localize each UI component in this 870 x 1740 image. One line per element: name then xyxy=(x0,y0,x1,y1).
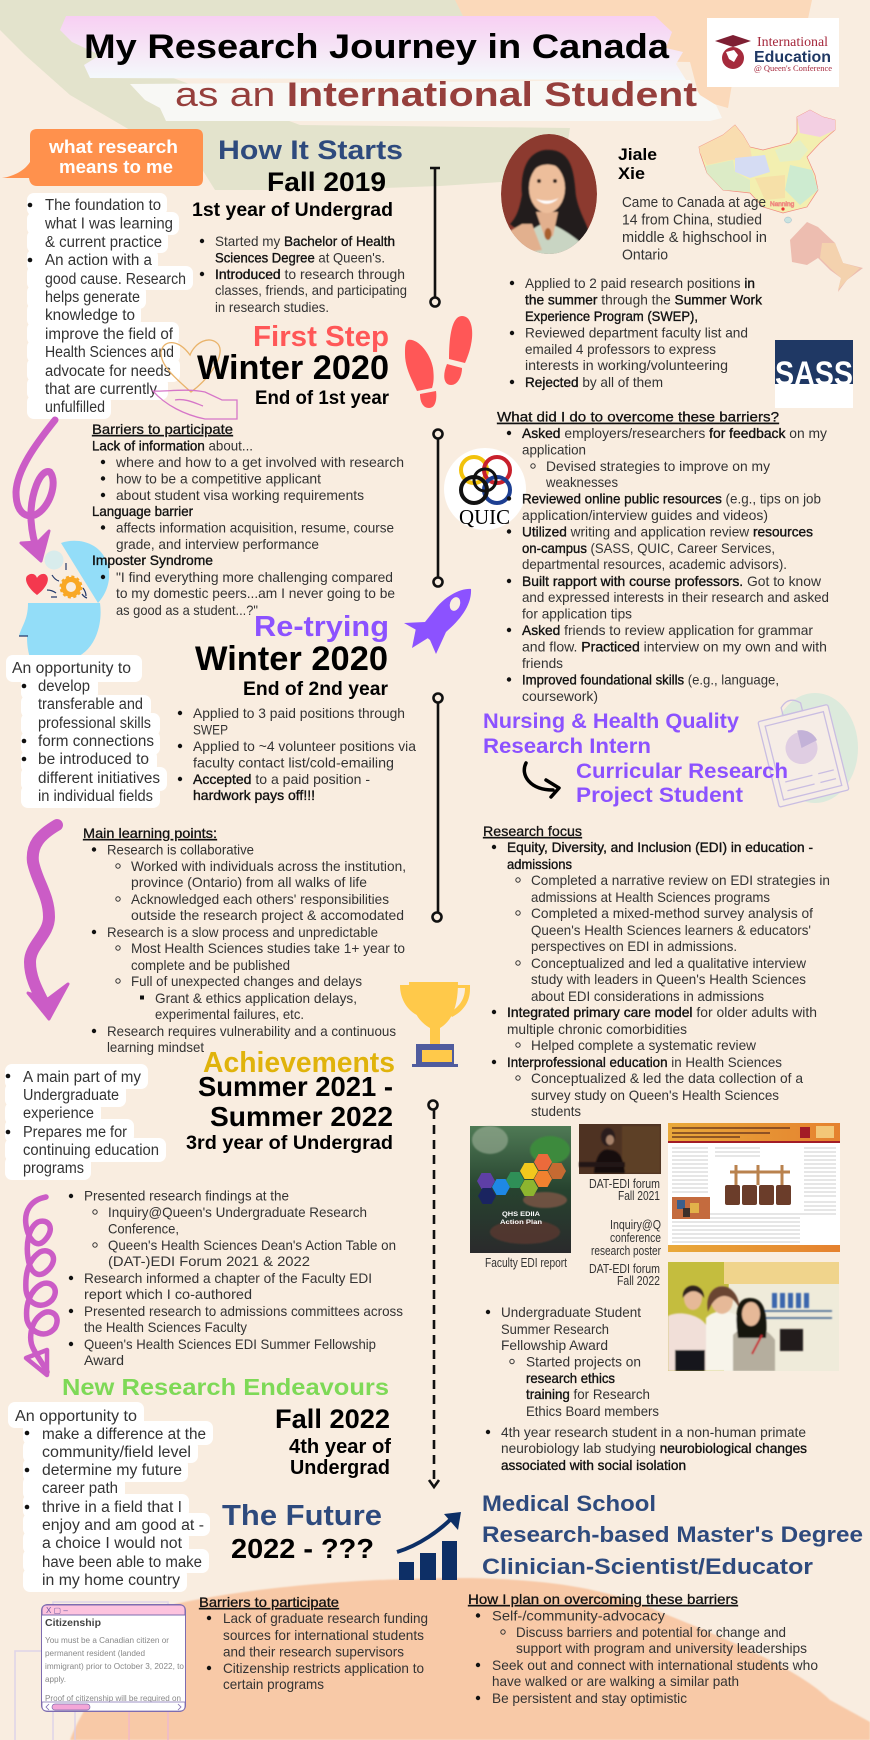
text block: an opportunity to (white highlight): develop xyxy=(38,678,90,695)
captions for images xyxy=(485,1177,661,1288)
text block: research focus: Completed a narrative review on EDI strategies in xyxy=(531,872,830,888)
heading: New Research Endeavours xyxy=(62,1374,391,1479)
text block: new research roles: Ethics Board members xyxy=(526,1403,659,1419)
title brush strokes xyxy=(60,16,722,121)
heading: The Future: The Future xyxy=(222,1500,382,1532)
background wash: orange blob bottom xyxy=(70,1578,870,1740)
text block: how it starts: classes, friends, and participating xyxy=(215,282,407,298)
text block: an opportunity for the future (white highlight): make a difference at the xyxy=(42,1426,206,1443)
captions for images: Fall 2022 xyxy=(617,1274,660,1288)
text block: achievements list: Conference, xyxy=(108,1220,179,1236)
text block: barriers to participate: as good as a student...?" xyxy=(116,602,258,618)
text block: how I overcame barriers: and expressed interests in their research and asked xyxy=(522,589,829,605)
text block: research focus: study with leaders in Queen's Health Sciences xyxy=(531,971,806,987)
logo: International Education at Queen's Conference: Education xyxy=(754,49,831,66)
citizenship window screenshot: Citizenship xyxy=(45,1617,101,1629)
text block: what research means (white highlight): The foundation to xyxy=(45,197,161,214)
icon: heart in hand xyxy=(153,340,237,419)
text block: how it starts: in research studies. xyxy=(215,299,329,315)
text block: achievements list: Presented research findings at the xyxy=(84,1188,289,1204)
text block: research focus: admissions at Health Sciences programs xyxy=(531,889,770,905)
future goals list: Clinician-Scientist/Educator xyxy=(482,1554,813,1579)
QUIC logo xyxy=(444,448,526,530)
logo: SASS: SASS xyxy=(775,355,853,393)
text block: what research means (white highlight): Health Sciences and xyxy=(45,344,174,361)
text block: an opportunity to (white highlight): be introduced to xyxy=(38,751,149,768)
citizenship window screenshot: immigrant) prior to October 3, 2022, to xyxy=(45,1662,185,1671)
text block: what research means (white highlight): improve the field of xyxy=(45,326,174,343)
text block: first step actions: Reviewed department faculty list and xyxy=(525,324,748,340)
map: Ontario xyxy=(790,222,863,292)
text block: an opportunity for the future (white highlight): have been able to make xyxy=(42,1554,202,1571)
text block: achievements list: the Health Sciences Faculty xyxy=(84,1319,247,1335)
text block: future barriers: sources for international students xyxy=(223,1627,424,1643)
heading: How It Starts: How It Starts xyxy=(218,135,403,165)
arrow: magenta squiggle 1 xyxy=(16,420,55,561)
text block: overcoming future barriers: Discuss barriers and potential for change and xyxy=(516,1624,786,1640)
text block: how I overcame barriers xyxy=(507,425,829,704)
timeline segment 1 xyxy=(430,168,440,306)
timeline segment 3 xyxy=(432,694,442,922)
text block: how I overcame barriers: Asked friends to review application for grammar xyxy=(522,622,813,638)
text block: how it starts: Sciences Degree at Queen's. xyxy=(215,250,385,266)
captions for images: research poster xyxy=(591,1244,661,1258)
speech bubble: what research means to me: what research xyxy=(48,137,178,157)
image: Faculty EDI report cover: Action Plan xyxy=(500,1219,542,1226)
text block: future barriers xyxy=(199,1594,428,1692)
heading: internship roles: Project Student xyxy=(576,784,743,807)
text block: future barriers: certain programs xyxy=(223,1676,324,1692)
citizenship window screenshot: X ▢ – xyxy=(46,1606,68,1615)
text block: how I overcame barriers: application/interview guides and videos) xyxy=(522,507,768,523)
text block: barriers to participate: Barriers to participate xyxy=(92,421,233,437)
heading: internship roles: Research Intern xyxy=(483,735,651,758)
text block: research focus: perspectives on EDI in admissions. xyxy=(531,938,737,954)
arrow: curved black xyxy=(524,763,559,797)
text block: barriers to participate: Imposter Syndrome xyxy=(92,552,213,568)
text block: about me xyxy=(622,194,767,264)
neon window frames decoration xyxy=(15,1602,168,1740)
text block: first step actions: interests in working/volunteering xyxy=(525,357,728,373)
text block: research focus: admissions xyxy=(507,856,572,872)
map: China: Nanning xyxy=(770,201,795,208)
text block: first step actions: the summer through the Summer Work xyxy=(525,292,763,308)
text block: what research means (white highlight) xyxy=(27,193,193,419)
heading: internship roles: Nursing & Health Quality xyxy=(483,710,739,733)
text block: barriers to participate xyxy=(92,421,404,618)
text block: an opportunity to (white highlight): different initiatives xyxy=(38,770,160,787)
text block: main part of undergrad (white highlight): experience xyxy=(23,1105,94,1122)
text block: an opportunity for the future (white highlight): a choice I would not xyxy=(42,1535,183,1552)
text block: barriers to participate: Language barrier xyxy=(92,503,193,519)
citizenship window screenshot: You must be a Canadian citizen or xyxy=(45,1636,169,1645)
text block: first step actions: emailed 4 professors to express xyxy=(525,341,716,357)
text block: what research means (white highlight): unfulfilled xyxy=(45,399,105,416)
text block: how it starts: Started my Bachelor of Health xyxy=(215,233,395,249)
speech bubble: what research means to me xyxy=(2,129,203,186)
captions for images: Faculty EDI report xyxy=(485,1256,567,1270)
heading: How It Starts: Fall 2019 xyxy=(267,167,386,197)
text block: overcoming future barriers: have walked or are walking a similar path xyxy=(492,1673,739,1689)
text block: re-trying actions: Applied to ~4 volunteer positions via xyxy=(193,738,416,754)
text block: about me: Ontario xyxy=(622,246,668,264)
text block: first step actions: Rejected by all of them xyxy=(525,374,663,390)
text block: achievements list: Queen's Health Sciences Dean's Action Table on xyxy=(108,1237,396,1253)
icon: rising bar chart xyxy=(397,1512,461,1580)
QUIC logo: QUIC xyxy=(459,505,510,529)
text block: re-trying actions: faculty contact list/cold-emailing xyxy=(193,754,394,770)
text block: about me: Came to Canada at age xyxy=(622,194,766,211)
citizenship window screenshot: apply. xyxy=(45,1675,66,1684)
text block: what research means (white highlight): An action with a xyxy=(45,252,152,269)
text block: barriers to participate: how to be a competitive applicant xyxy=(116,470,321,486)
text block: barriers to participate: "I find everything more challenging compared xyxy=(116,569,393,585)
heading: Re-trying: End of 2nd year xyxy=(243,679,389,700)
text block: how I overcame barriers: application xyxy=(522,442,586,458)
heading: Achievements: Achievements xyxy=(203,1047,395,1079)
text block: how I overcame barriers: Improved foundational skills (e.g., language, xyxy=(522,672,779,688)
captions for images: DAT-EDI forum xyxy=(589,1262,660,1276)
text block: main learning points: complete and be published xyxy=(131,957,290,973)
text block: main learning points: Research is collaborative xyxy=(107,842,254,858)
text block: main learning points xyxy=(83,825,406,1055)
image: DAT-EDI forum 2022 photo of three women xyxy=(668,1262,839,1371)
text block: what research means (white highlight): helps generate xyxy=(45,289,140,306)
text block: main part of undergrad (white highlight): Prepares me for xyxy=(23,1124,127,1141)
text block: overcoming future barriers: Be persistent and stay optimistic xyxy=(492,1690,687,1706)
text block: how I overcame barriers: Reviewed online public resources (e.g., tips on job xyxy=(522,490,821,506)
text block: research focus: students xyxy=(531,1103,581,1119)
heading: New Research Endeavours: Undergrad xyxy=(290,1457,390,1479)
text block: first step actions: Applied to 2 paid research positions in xyxy=(525,275,755,291)
text block: how I overcame barriers: friends xyxy=(522,655,563,671)
heading: The Future xyxy=(222,1500,382,1564)
icon: trophy xyxy=(400,982,470,1067)
text block: how I overcame barriers: departmental resources, academic advisors). xyxy=(522,556,787,572)
text block: research focus: Interprofessional education in Health Sciences xyxy=(507,1054,782,1070)
text block: main learning points: Main learning points: xyxy=(83,825,217,841)
text block: main learning points: Acknowledged each others' responsibilities xyxy=(131,891,389,907)
text block: research focus: multiple chronic comorbidities xyxy=(507,1021,687,1037)
heading: internship roles: Curricular Research xyxy=(576,760,788,783)
text block: achievements list xyxy=(69,1188,403,1368)
map: China xyxy=(699,110,835,223)
title: My Research Journey in Canada xyxy=(84,28,670,66)
text block: new research roles: Undergraduate Student xyxy=(501,1304,641,1320)
text block: how I overcame barriers: coursework) xyxy=(522,688,598,704)
text block: overcoming future barriers: Seek out and connect with international students who xyxy=(492,1657,818,1673)
text block: new research roles: neurobiology lab studying neurobiological changes xyxy=(501,1440,807,1456)
text block: future barriers: Citizenship restricts application to xyxy=(223,1660,424,1676)
text block: research focus: about EDI considerations in admissions xyxy=(531,988,764,1004)
text block: main part of undergrad (white highlight): programs xyxy=(23,1160,84,1177)
text block: re-trying actions: SWEP xyxy=(193,722,228,738)
text block: overcoming future barriers xyxy=(468,1591,818,1706)
text block: what research means (white highlight): knowledge to xyxy=(45,307,135,324)
text block: how it starts xyxy=(200,233,407,315)
timeline segment 4: dashed arrow xyxy=(428,1100,439,1487)
captions for images: DAT-EDI forum xyxy=(589,1177,660,1191)
text block: first step actions: Experience Program (SWEP), xyxy=(525,308,698,324)
text block: main learning points: Research requires vulnerability and a continuous xyxy=(107,1023,396,1039)
text block: what research means (white highlight): what I was learning xyxy=(44,216,173,232)
text block: main part of undergrad (white highlight): Undergraduate xyxy=(23,1087,119,1104)
name: Jiale Xie: Jiale xyxy=(618,145,657,164)
text block: main learning points: Grant & ethics application delays, xyxy=(155,990,357,1006)
text block: main learning points: Full of unexpected changes and delays xyxy=(131,973,362,989)
heading: How It Starts xyxy=(192,135,403,221)
heading: Achievements xyxy=(186,1047,395,1154)
image: DAT-EDI forum 2021 photo xyxy=(579,1124,661,1174)
text block: re-trying actions xyxy=(178,705,416,803)
logo: International Education at Queen's Conference xyxy=(707,18,839,87)
text block: new research roles: 4th year research student in a non-human primate xyxy=(501,1424,806,1440)
image: Faculty EDI report cover xyxy=(470,1126,571,1253)
text block: how I overcame barriers: for application tips xyxy=(522,606,632,622)
text block: future barriers: and their research supervisors xyxy=(223,1644,404,1660)
text block: overcoming future barriers: How I plan on overcoming these barriers xyxy=(468,1591,738,1607)
text block: about me: middle & highschool in xyxy=(622,229,767,246)
text block: research focus: Conceptualized and led a qualitative interview xyxy=(531,955,807,971)
text block: an opportunity to (white highlight): in individual fields xyxy=(38,788,153,805)
heading: Achievements: 3rd year of Undergrad xyxy=(186,1133,393,1154)
citizenship window screenshot xyxy=(42,1604,186,1712)
text block: what research means (white highlight): that are currently xyxy=(45,381,157,398)
heading: First Step xyxy=(197,321,390,409)
text block: an opportunity for the future (white highlight): An opportunity to xyxy=(15,1408,137,1425)
heading: New Research Endeavours: New Research Endeavours xyxy=(62,1374,389,1400)
text block: main learning points: outside the research project & accomodated xyxy=(131,907,404,923)
text block: what research means (white highlight): advocate for needs xyxy=(45,363,171,380)
text block: an opportunity for the future (white highlight) xyxy=(8,1402,213,1592)
text block: an opportunity to (white highlight): transferable and xyxy=(38,696,143,713)
heading: Re-trying: Re-trying xyxy=(254,611,389,643)
icon: clipboard with pie chart xyxy=(755,692,858,807)
text block: barriers to participate: Lack of information about... xyxy=(92,438,253,454)
text block: new research roles: Fellowship Award xyxy=(501,1337,608,1353)
text block: barriers to participate: to my domestic peers...am I never going to be xyxy=(116,585,395,601)
text block: barriers to participate: affects information acquisition, resume, course xyxy=(116,520,394,536)
text block: research focus: Completed a mixed-method survey analysis of xyxy=(531,905,813,921)
text block: how it starts: Introduced to research through xyxy=(215,266,405,282)
text block: main part of undergrad (white highlight): A main part of my xyxy=(23,1069,141,1086)
speech bubble: what research means to me: means to me xyxy=(59,157,173,177)
text block: barriers to participate: grade, and interview performance xyxy=(116,536,319,552)
text block: research focus: Conceptualized & led the data collection of a xyxy=(531,1070,803,1086)
text block: an opportunity to (white highlight) xyxy=(6,655,167,808)
name: Jiale Xie: Xie xyxy=(618,164,645,183)
text block: an opportunity to (white highlight): professional skills xyxy=(38,715,151,732)
text block: achievements list: report which I co-authored xyxy=(84,1286,252,1302)
icon: head with heart and gear xyxy=(19,541,109,658)
text block: new research roles: Started projects on xyxy=(526,1354,641,1370)
text block: main part of undergrad (white highlight) xyxy=(5,1064,166,1180)
text block: overcoming future barriers: Self-/community-advocacy xyxy=(492,1608,665,1624)
arrow: magenta wavy 2 xyxy=(28,825,68,1019)
text block: how I overcame barriers: weaknesses xyxy=(545,474,618,490)
heading: New Research Endeavours: Fall 2022 xyxy=(275,1404,390,1434)
icon: rocket xyxy=(404,589,471,654)
text block: main learning points: Most Health Sciences studies take 1+ year to xyxy=(131,940,405,956)
text block: new research roles xyxy=(486,1304,807,1473)
text block: achievements list: Presented research to admissions committees across xyxy=(84,1303,403,1319)
image: Inquiry@Q research poster xyxy=(668,1123,840,1252)
name: Jiale Xie xyxy=(618,145,657,183)
text block: new research roles: Summer Research xyxy=(501,1321,609,1337)
text block: first step actions xyxy=(510,275,763,390)
heading: Re-trying: Winter 2020 xyxy=(195,640,388,678)
text block: research focus: Helped complete a systematic review xyxy=(531,1037,757,1053)
text block: barriers to participate: about student visa working requirements xyxy=(116,487,364,503)
heading: Achievements: Summer 2022 xyxy=(210,1101,393,1132)
text block: overcoming future barriers: support with program and university leaderships xyxy=(516,1640,807,1656)
text block: an opportunity for the future (white highlight): community/field level xyxy=(42,1444,191,1461)
logo: International Education at Queen's Conference: @ Queen's Conference xyxy=(754,64,832,73)
title xyxy=(84,28,697,114)
text block: barriers to participate: where and how to a get involved with research xyxy=(115,454,404,470)
text block: how I overcame barriers: Utilized writing and application review resources xyxy=(522,524,813,540)
text block: achievements list: Queen's Health Sciences EDI Summer Fellowship xyxy=(84,1336,376,1352)
text block: re-trying actions: Applied to 3 paid positions through xyxy=(193,705,405,721)
future goals list: Research-based Master's Degree xyxy=(482,1522,863,1547)
heading: First Step: Winter 2020 xyxy=(197,349,389,387)
text block: an opportunity to (white highlight): form connections xyxy=(38,733,154,750)
text block: research focus xyxy=(483,823,830,1119)
text block: new research roles: training for Research xyxy=(526,1386,650,1402)
heading: First Step: First Step xyxy=(253,321,389,353)
heading: First Step: End of 1st year xyxy=(255,388,390,409)
heading: what did I do: What did I do to overcome these barriers? xyxy=(497,409,779,425)
icon: footprints xyxy=(405,316,472,408)
text block: what research means (white highlight): & current practice xyxy=(45,234,162,251)
background wash: olive brush xyxy=(0,0,570,190)
text block: research focus: Research focus xyxy=(483,823,582,839)
text block: achievements list: (DAT-)EDI Forum 2021 & 2022 xyxy=(108,1253,310,1269)
text block: how I overcame barriers: Asked employers/researchers for feedback on my xyxy=(522,425,827,441)
heading: New Research Endeavours: 4th year of xyxy=(289,1436,391,1458)
text block: future barriers: Barriers to participate xyxy=(199,1594,339,1610)
future goals list: Medical School xyxy=(482,1491,656,1516)
captions for images: Fall 2021 xyxy=(618,1189,660,1203)
text block: how I overcame barriers: Built rapport with course professors. Got to know xyxy=(522,573,822,589)
logo: International Education at Queen's Conference: International xyxy=(757,34,828,49)
text block: re-trying actions: Accepted to a paid position - xyxy=(193,771,370,787)
future goals list xyxy=(482,1491,863,1579)
text block: new research roles: associated with social isolation xyxy=(501,1457,686,1473)
logo: SASS xyxy=(775,340,853,408)
text block: main learning points: Worked with individuals across the institution, xyxy=(131,858,406,874)
text block: main learning points: Research is a slow process and unpredictable xyxy=(107,924,378,940)
captions for images: Inquiry@Q xyxy=(610,1218,661,1232)
text block: an opportunity for the future (white highlight): enjoy and am good at - xyxy=(42,1517,204,1534)
arrow: magenta curly 3 xyxy=(26,1197,57,1375)
text block: achievements list: Inquiry@Queen's Undergraduate Research xyxy=(108,1204,367,1220)
text block: main part of undergrad (white highlight): continuing education xyxy=(23,1142,159,1159)
heading: How It Starts: 1st year of Undergrad xyxy=(192,200,393,221)
text block: research focus: Integrated primary care model for older adults with xyxy=(507,1004,817,1020)
text block: what research means (white highlight): good cause. Research xyxy=(45,271,186,288)
heading: internship roles xyxy=(483,710,788,807)
heading: Re-trying xyxy=(195,611,389,700)
text block: an opportunity for the future (white highlight): career path xyxy=(42,1480,118,1497)
captions for images: conference xyxy=(610,1231,661,1245)
text block: achievements list: Award xyxy=(84,1352,124,1368)
text block: main learning points: learning mindset xyxy=(107,1039,204,1055)
heading: The Future: 2022 - ??? xyxy=(231,1533,374,1564)
text block: how I overcame barriers: Devised strategies to improve on my xyxy=(546,458,770,474)
text block: about me: 14 from China, studied xyxy=(622,212,762,228)
text block: achievements list: Research informed a chapter of the Faculty EDI xyxy=(84,1270,372,1286)
text block: main learning points: experimental failures, etc. xyxy=(155,1006,304,1022)
citizenship window screenshot: Proof of citizenship will be required on xyxy=(45,1694,181,1703)
title: as an International Student xyxy=(175,76,697,114)
citizenship window screenshot: permanent resident (landed xyxy=(45,1649,145,1658)
background wash: peach brush xyxy=(455,0,812,108)
text block: future barriers: Lack of graduate research funding xyxy=(223,1610,428,1626)
text block: main learning points: province (Ontario) from all walks of life xyxy=(131,874,367,890)
image: Faculty EDI report cover: QHS EDIIA xyxy=(502,1211,540,1218)
text block: research focus: survey study on Queen's Health Sciences xyxy=(531,1087,779,1103)
portrait photo xyxy=(501,134,597,260)
text block: how I overcame barriers: and flow. Practiced interview on my own and with xyxy=(522,638,827,654)
text block: an opportunity to (white highlight): An opportunity to xyxy=(12,660,131,677)
timeline segment 2 xyxy=(434,430,442,586)
text block: re-trying actions: hardwork pays off!!! xyxy=(193,787,315,803)
text block: research focus: Equity, Diversity, and Inclusion (EDI) in education - xyxy=(507,839,813,855)
text block: an opportunity for the future (white highlight): in my home country xyxy=(42,1572,180,1589)
text block: new research roles: research ethics xyxy=(526,1370,615,1386)
text block: how I overcame barriers: on-campus (SASS, QUIC, Career Services, xyxy=(522,540,775,556)
text block: research focus: Queen's Health Sciences learners & educators' xyxy=(531,922,811,938)
heading: Achievements: Summer 2021 - xyxy=(198,1071,393,1102)
text block: an opportunity for the future (white highlight): thrive in a field that I xyxy=(42,1499,182,1516)
text block: an opportunity for the future (white highlight): determine my future xyxy=(42,1462,182,1479)
